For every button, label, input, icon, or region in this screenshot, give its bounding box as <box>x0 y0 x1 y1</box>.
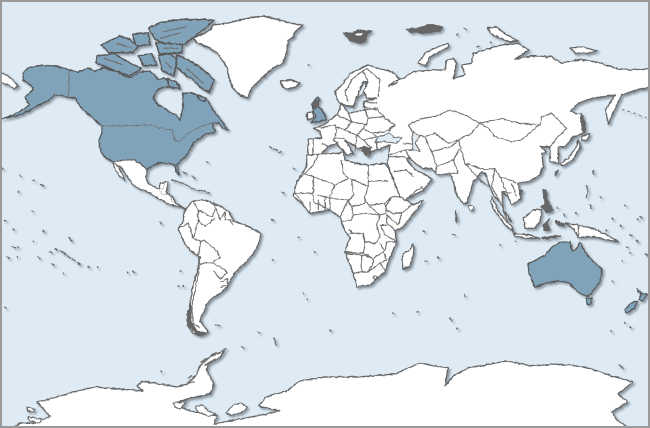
Chukotka across the date line <box>0 72 18 89</box>
New Guinea <box>565 223 618 242</box>
southern countries <box>192 240 228 328</box>
New Siberian Islands <box>570 47 597 53</box>
Antarctica <box>10 351 633 428</box>
Ellesmere group <box>148 19 214 47</box>
Lesotho <box>373 276 377 279</box>
Antarctic ice shelf islands <box>27 402 247 423</box>
highlighted: Tasmania <box>586 298 592 305</box>
Baja California <box>113 163 125 181</box>
Mexico and Central America <box>113 160 185 209</box>
small islands <box>2 28 648 372</box>
Borneo <box>523 209 542 228</box>
Andaman and Nicobar islands <box>455 210 457 221</box>
South America <box>178 200 261 336</box>
European country borders <box>313 68 395 157</box>
highlighted: United Kingdom <box>311 97 326 123</box>
Sri Lanka <box>469 205 473 211</box>
Asian country borders <box>388 110 567 202</box>
Somerset and Boothia <box>158 54 177 76</box>
Banks Island <box>101 36 138 53</box>
Hokkaido <box>582 133 590 141</box>
South America borders <box>178 202 233 328</box>
Sulawesi <box>543 218 550 231</box>
Ross Sea island <box>27 407 35 412</box>
Kuril Islands <box>622 109 650 119</box>
Ireland <box>307 111 313 120</box>
Black Sea <box>375 133 402 143</box>
Devon and Cornwallis islands <box>156 43 183 54</box>
Africa <box>293 152 423 287</box>
Southampton Island <box>167 78 180 88</box>
Iceland <box>280 80 300 89</box>
Greenland <box>193 16 303 98</box>
Caribbean islands <box>172 172 209 193</box>
Melville Island <box>133 33 150 46</box>
highlighted: New Zealand <box>625 289 647 313</box>
Sakhalin <box>581 113 585 133</box>
Japan <box>560 133 590 166</box>
Taiwan and Hainan <box>519 170 558 193</box>
Severnaya Zemlya <box>488 27 518 42</box>
Franz Josef Land <box>406 24 443 33</box>
channel lines <box>103 27 203 83</box>
Lesser Sunda Islands <box>542 220 565 239</box>
Novaya Zemlya <box>418 43 449 66</box>
Quebec north shore island <box>197 95 207 102</box>
Victoria Island <box>96 53 142 76</box>
Honshu <box>560 140 581 166</box>
Gulf of Bothnia <box>357 83 367 97</box>
northern countries <box>178 202 233 257</box>
Madagascar <box>402 244 414 269</box>
Peter I island <box>28 417 42 423</box>
Prince of Wales Island <box>138 54 157 66</box>
Ronne coast fragment <box>173 402 186 409</box>
Chilean fjord coast <box>188 303 206 335</box>
Svalbard <box>343 30 372 43</box>
African country borders <box>295 155 413 273</box>
highlighted: Australia <box>528 242 602 296</box>
Baffin Island <box>176 55 214 93</box>
highlighted: Alaska, Canada and USA mainland <box>2 65 228 175</box>
Mariana arc <box>586 185 588 198</box>
highlighted: Canadian Arctic islands <box>96 19 214 102</box>
Greek islands cluster <box>362 146 371 155</box>
Philippines <box>541 189 553 213</box>
Alexander Island <box>195 405 216 416</box>
Scotland dark coast <box>312 99 319 109</box>
US-Canada and Alaska borders <box>69 70 212 141</box>
Central America borders <box>158 183 180 205</box>
Java <box>513 233 540 238</box>
Antarctic Peninsula dark islands <box>141 351 223 383</box>
Eurasia <box>308 43 650 222</box>
Sumatra <box>491 197 513 232</box>
Caspian Sea <box>412 132 420 152</box>
Southeast Asian islands <box>491 189 618 242</box>
Berkner Island <box>226 403 247 415</box>
